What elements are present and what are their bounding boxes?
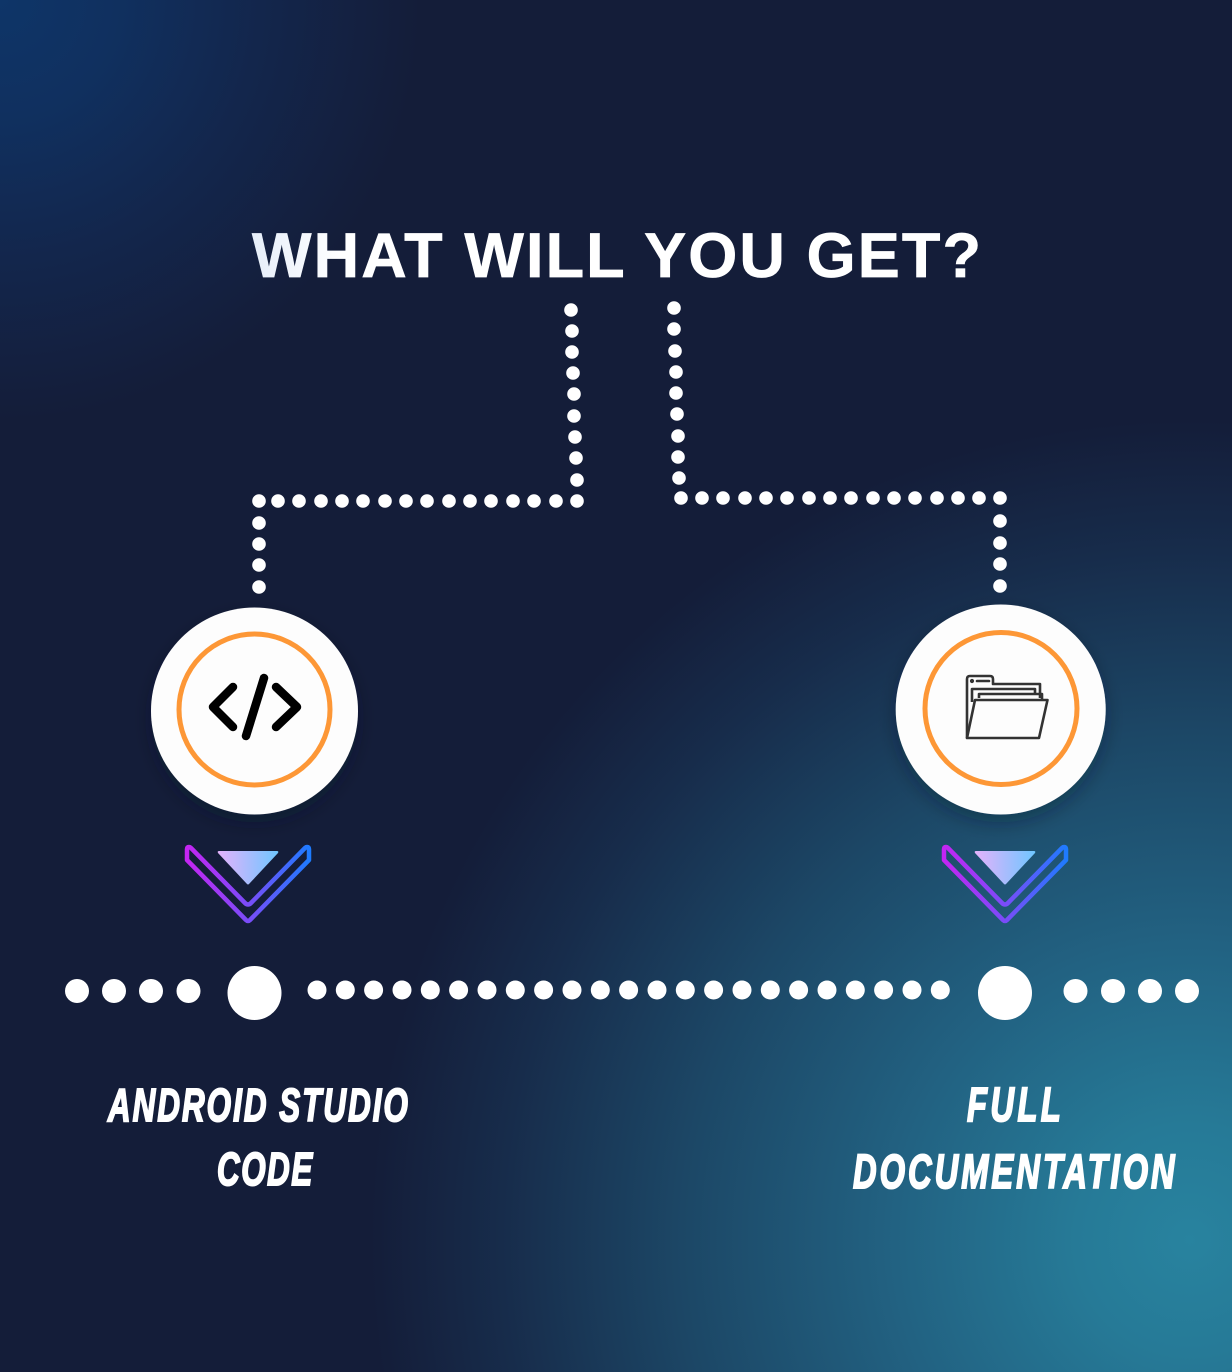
badge: full documentation <box>896 604 1106 814</box>
label: Full Documentation <box>853 1078 1176 1199</box>
icon: open folder <box>967 676 1048 738</box>
dotted connector: title to Android Studio Code <box>252 303 584 594</box>
dotted connector: title to Full Documentation <box>667 301 1007 593</box>
badge: Android Studio code <box>151 608 358 814</box>
label: Full Documentation: DOCUMENTATION <box>853 1145 1176 1199</box>
timeline: dotted line with two milestone nodes <box>65 966 1199 1020</box>
title: WHAT WILL YOU GET? <box>252 221 981 291</box>
icon: code brackets <box>213 678 297 736</box>
chevron marker: right <box>944 847 1066 921</box>
chevron marker: left <box>187 847 309 921</box>
label: Android Studio Code <box>107 1080 408 1196</box>
label: Full Documentation: FULL <box>967 1078 1061 1132</box>
label: Android Studio Code: ANDROID STUDIO <box>107 1080 408 1132</box>
label: Android Studio Code: CODE <box>217 1144 314 1196</box>
